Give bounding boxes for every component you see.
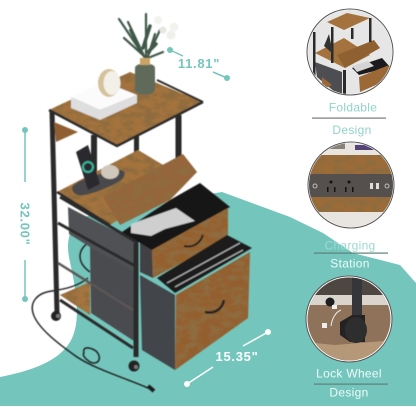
circle photo: power strip (309, 143, 393, 227)
label: Charging (324, 238, 376, 252)
callout: lock wheel design: Design (329, 386, 369, 400)
callout: foldable design: Design (332, 123, 372, 137)
top drawer (122, 183, 230, 278)
circle ring (308, 142, 394, 228)
product: file cabinet (32, 14, 252, 391)
bottom shelf (60, 282, 90, 315)
plug (148, 386, 154, 391)
flower vase (119, 14, 178, 94)
callout: foldable design (305, 8, 395, 137)
dimension: height 32.00 (18, 127, 32, 302)
teal background shape (0, 192, 416, 406)
callout: lock wheel design (305, 275, 395, 400)
dimension: depth 15.35 (184, 329, 271, 387)
circle photo: caster (306, 276, 392, 362)
power cord (32, 243, 154, 391)
casters (51, 311, 140, 372)
callout: charging station (305, 140, 397, 270)
dimension: width 11.81 (167, 47, 230, 81)
callout: charging station: Station (330, 256, 370, 270)
circle ring (307, 9, 393, 95)
bottom drawer (157, 235, 252, 370)
dimension: depth 15.35: 15.35" (216, 349, 258, 364)
circle ring (306, 276, 392, 362)
frame legs and rails (52, 110, 178, 357)
middle shelf with charger (57, 145, 185, 225)
top shelf (49, 72, 203, 146)
fabric side panels (68, 207, 175, 370)
book and clock (71, 69, 137, 120)
circle photo: foldable (308, 10, 392, 94)
label: Lock Wheel (316, 366, 382, 380)
label: Foldable (329, 100, 377, 114)
dimension: width 11.81: 11.81" (178, 56, 220, 71)
fold-up flap (103, 154, 197, 225)
dimension: height 32.00: 32.00" (18, 203, 32, 245)
